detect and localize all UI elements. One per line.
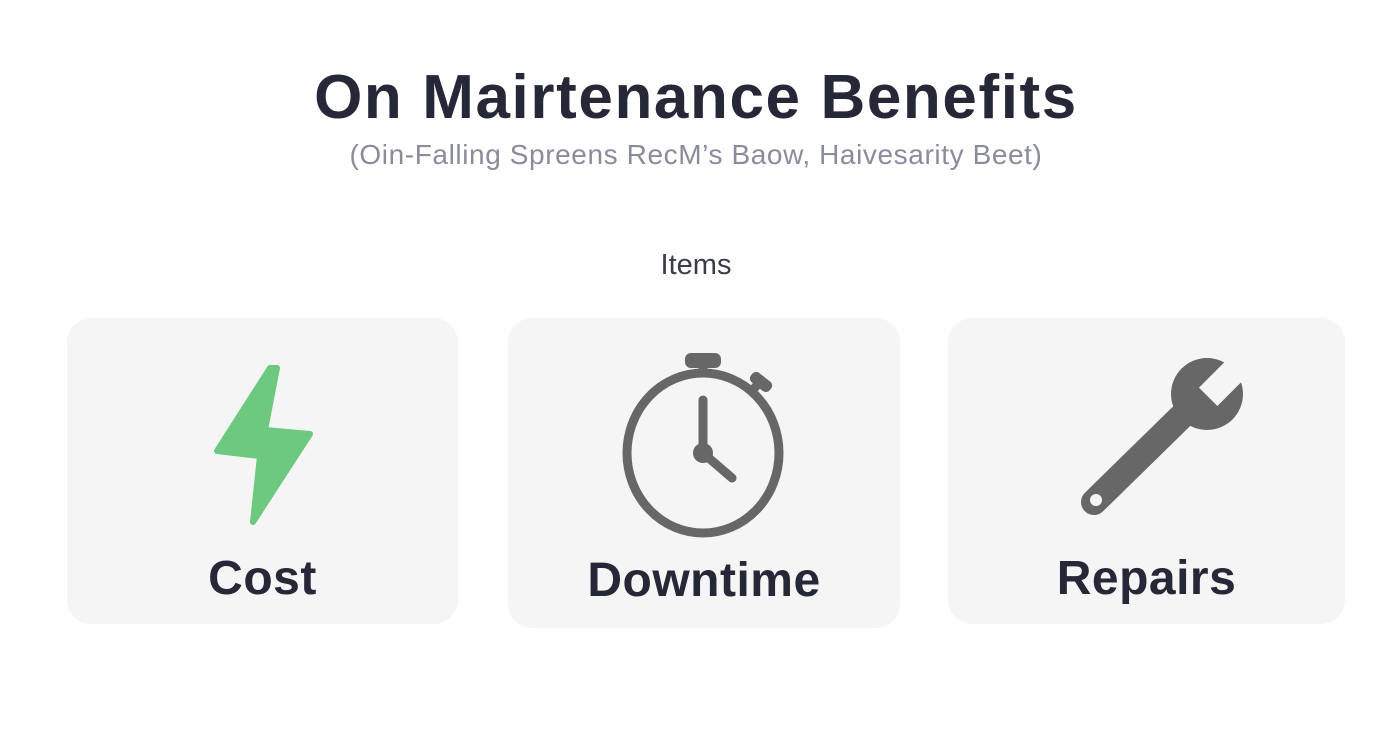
panel: repairs [948,318,1345,624]
title: On Mairtenance Benefits [314,63,1078,132]
label: Repairs: Repairs [1057,552,1236,605]
icon: wrench [1081,358,1243,515]
label: Downtime: Downtime [587,554,821,607]
icon: lightning bolt [214,365,313,525]
panel: cost [67,318,458,624]
panel: downtime [508,318,900,628]
label: Cost: Cost [208,552,317,605]
subtitle: (Oin-Falling Spreens RecM’s Baow, Haivesarity Beet) [349,139,1042,170]
icon: stopwatch [622,353,784,538]
section label: Items: Items [661,249,731,281]
